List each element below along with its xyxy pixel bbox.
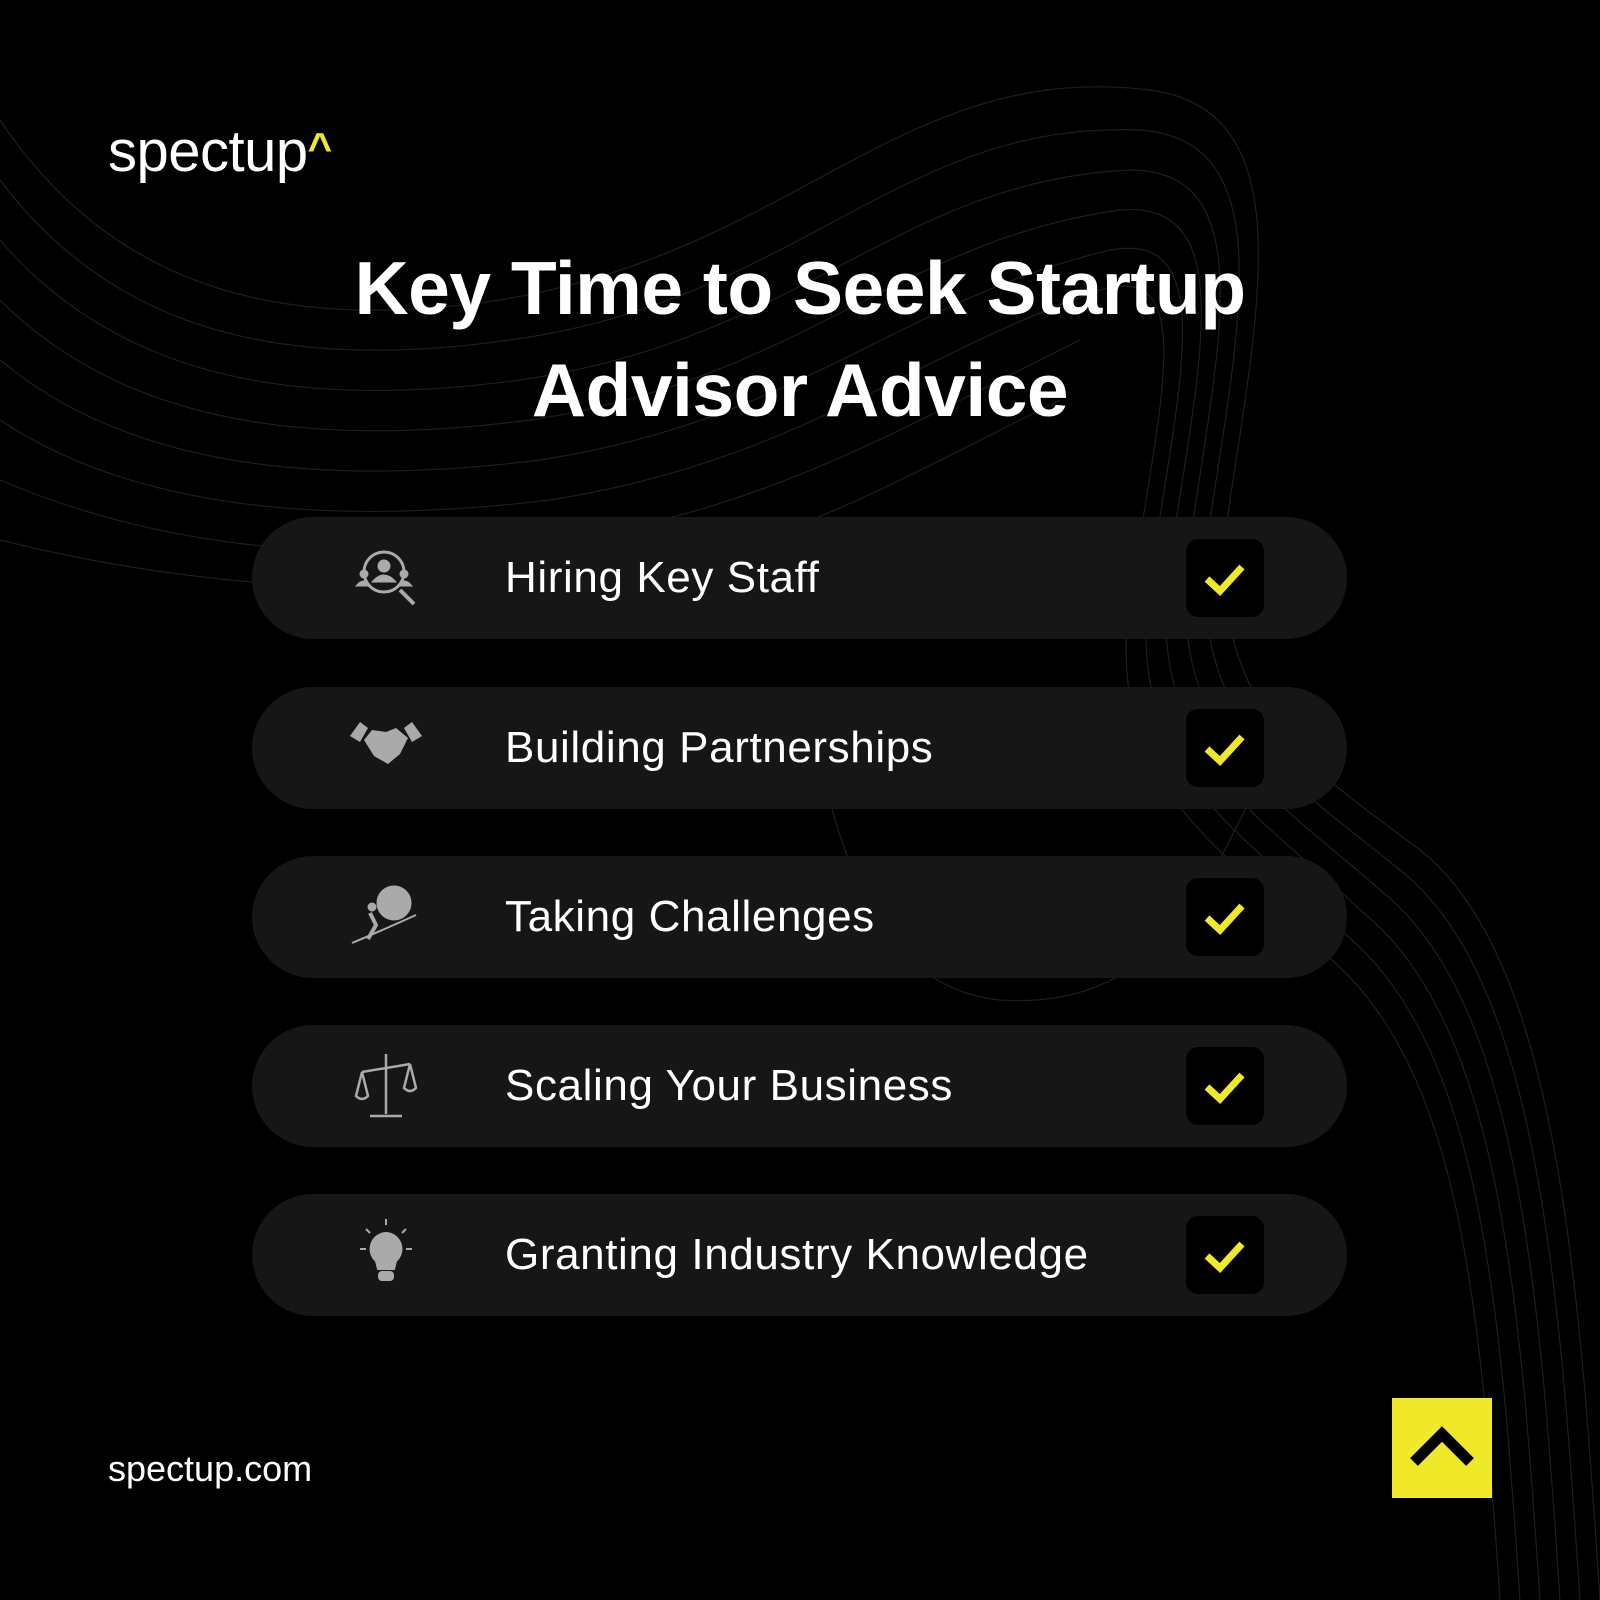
- label: Granting Industry Knowledge: [505, 1230, 1089, 1279]
- title: [354, 246, 1246, 432]
- label: Hiring Key Staff: [505, 553, 820, 602]
- title: Advisor Advice: [532, 348, 1068, 432]
- row: Scaling Your Business: [252, 1025, 1347, 1147]
- footer url: spectup.com: [108, 1448, 312, 1489]
- check box: [1186, 709, 1264, 787]
- icon: people search: [355, 550, 416, 606]
- check box: [1186, 1216, 1264, 1294]
- label: Taking Challenges: [505, 892, 875, 941]
- row: Granting Industry Knowledge: [252, 1194, 1347, 1316]
- check box: [1186, 878, 1264, 956]
- icon: pushing boulder: [352, 886, 416, 944]
- icon: light bulb: [360, 1219, 412, 1281]
- icon: handshake: [350, 722, 422, 764]
- label: Scaling Your Business: [505, 1061, 953, 1110]
- yellow up button: [1392, 1398, 1492, 1498]
- icon: scales: [354, 1054, 418, 1118]
- check box: [1186, 539, 1264, 617]
- check box: [1186, 1047, 1264, 1125]
- row: Taking Challenges: [252, 856, 1347, 978]
- title: Key Time to Seek Startup: [354, 246, 1246, 330]
- row: Hiring Key Staff: [252, 517, 1347, 639]
- row: Building Partnerships: [252, 687, 1347, 809]
- logo: spectup^: [108, 119, 332, 184]
- label: Building Partnerships: [505, 723, 933, 772]
